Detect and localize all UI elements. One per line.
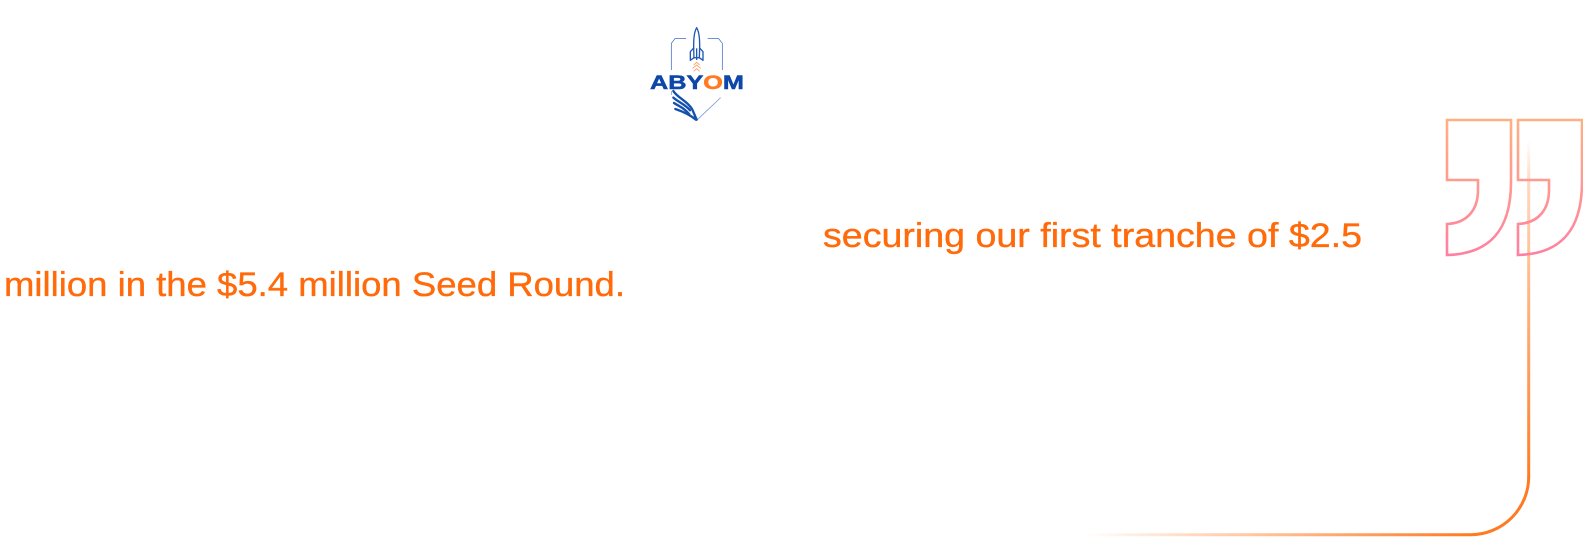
logo: ABYOM xyxy=(650,28,744,120)
quote text line 2: million in the $5.4 million Seed Round. xyxy=(4,266,625,304)
logo: rocket xyxy=(690,28,703,60)
icon: closing quotation marks xyxy=(1447,120,1582,255)
logo: wing xyxy=(673,91,697,120)
quote text line 1: securing our first tranche of $2.5 xyxy=(823,217,1362,255)
logo: shield outline xyxy=(671,39,722,120)
frame line: right and bottom edge xyxy=(1085,140,1529,535)
right quotation mark xyxy=(1518,120,1582,255)
left quotation mark xyxy=(1447,120,1511,255)
logo: orange chevrons xyxy=(693,62,701,71)
logo: wordmark: ABYOM xyxy=(650,73,744,94)
